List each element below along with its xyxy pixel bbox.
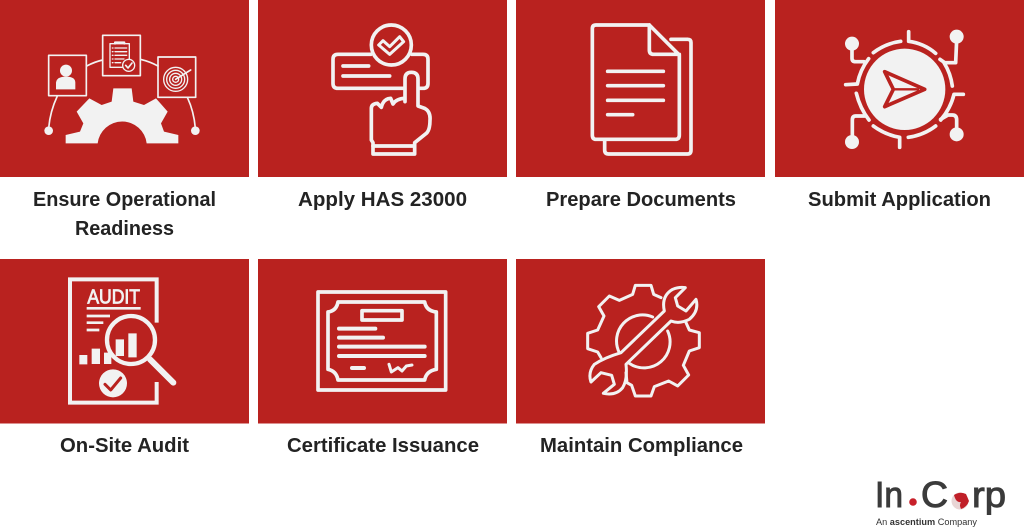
heading: Ensure Operational Readiness <box>33 188 216 240</box>
panel: Maintain Compliance <box>516 259 765 424</box>
panel: Certificate Issuance <box>258 259 507 424</box>
heading: Maintain Compliance: Maintain Compliance <box>540 434 743 457</box>
logo: InCorp: An ascentium Company <box>876 517 977 527</box>
icon: audit report with magnifier: AUDIT <box>87 286 140 308</box>
heading: Apply HAS 23000: Apply HAS 23000 <box>298 188 467 211</box>
logo: InCorp: C <box>921 474 948 515</box>
panel: Apply HAS 23000 <box>258 0 507 177</box>
heading: On-Site Audit: On-Site Audit <box>60 434 189 457</box>
heading: Submit Application: Submit Application <box>808 188 991 211</box>
heading: Prepare Documents: Prepare Documents <box>546 188 736 211</box>
logo: InCorp: rp <box>972 474 1006 515</box>
icon: gear with person, checklist and target <box>44 35 200 143</box>
icon: audit report with magnifier <box>70 279 173 403</box>
icon: gear and wrench <box>588 285 699 396</box>
panel: Prepare Documents <box>516 0 765 177</box>
panel: Submit Application <box>775 0 1024 177</box>
heading: Certificate Issuance: Certificate Issuance <box>287 434 479 457</box>
heading: Ensure Operational Readiness: Readiness <box>75 217 174 240</box>
icon: hand pressing checked button <box>333 25 430 154</box>
icon: stacked documents <box>592 25 691 154</box>
icon: red globe <box>952 492 969 510</box>
panel: On-Site Audit <box>0 259 249 424</box>
icon: framed certificate <box>318 292 446 390</box>
logo: InCorp <box>875 474 1006 527</box>
icon: send arrow in circuit ring <box>845 30 964 149</box>
heading: Ensure Operational Readiness: Ensure Operational <box>33 188 216 211</box>
panel: Ensure Operational Readiness <box>0 0 249 177</box>
logo: InCorp: In <box>875 474 903 515</box>
